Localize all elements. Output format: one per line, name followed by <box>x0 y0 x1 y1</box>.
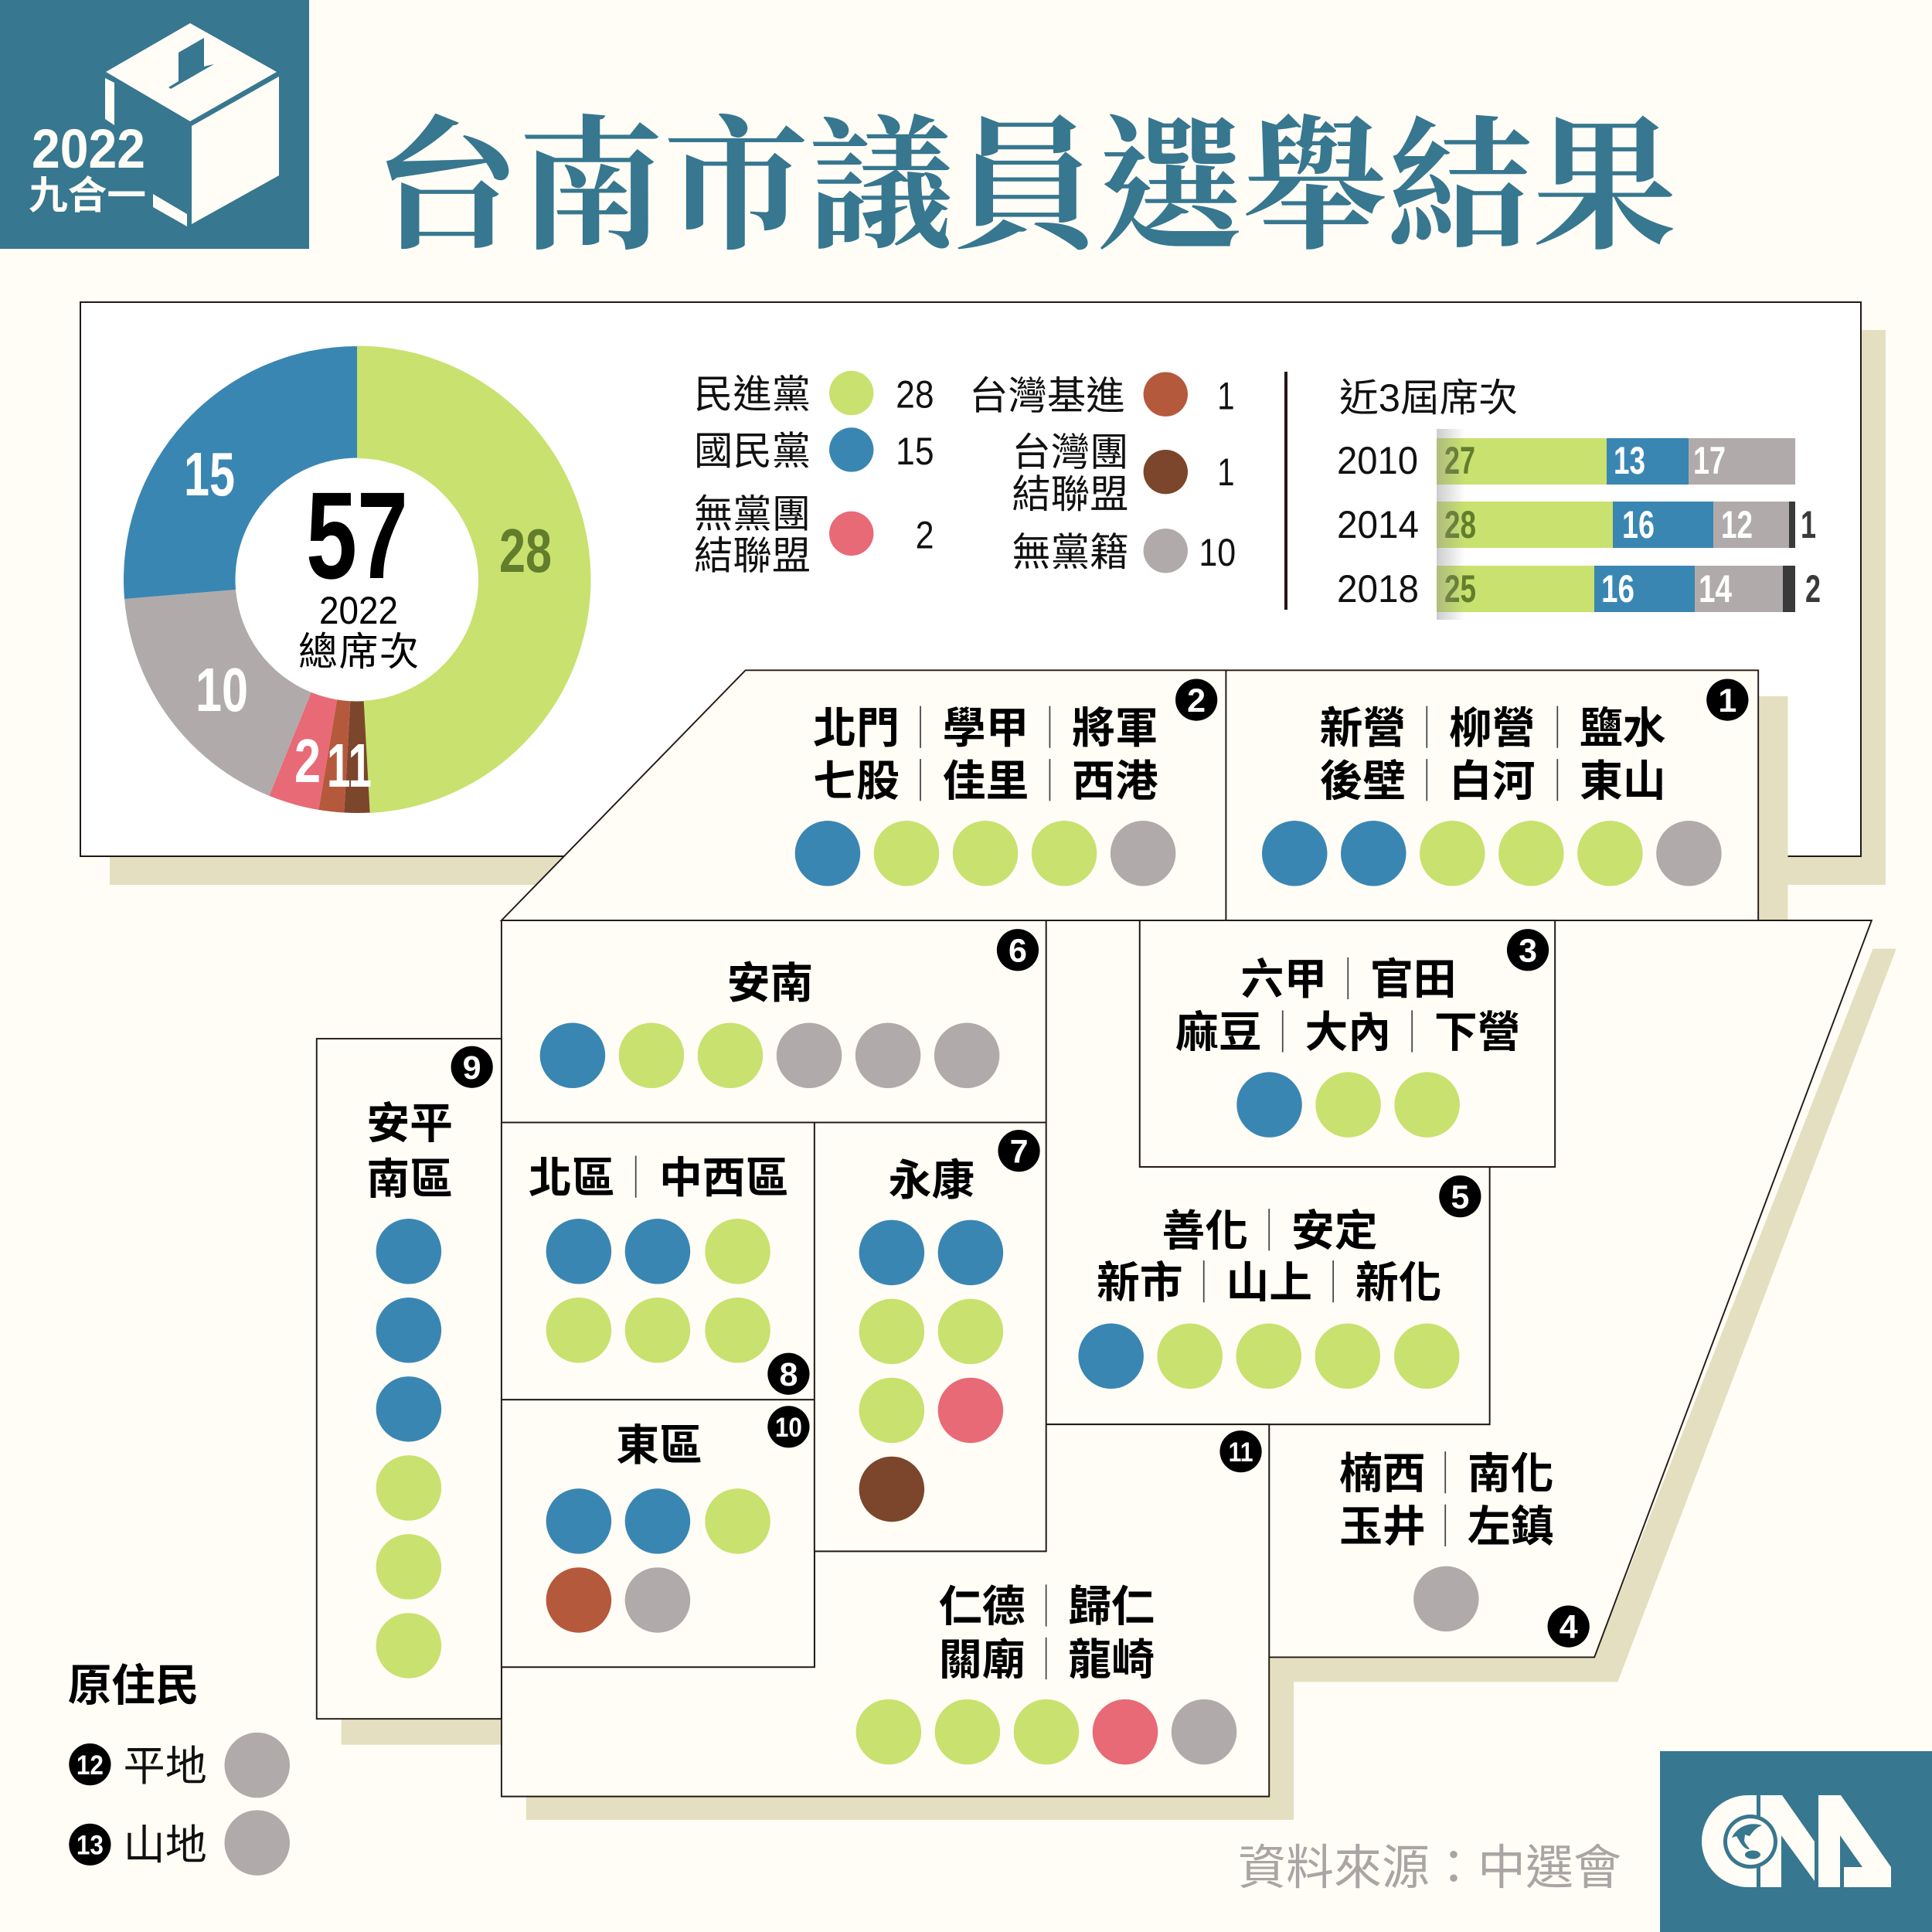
source note: 資料來源：中選會 <box>1238 1842 1621 1895</box>
legend item: 台灣團結聯盟: 結聯盟 <box>1012 472 1128 516</box>
region 9: 安平 南區 <box>317 1039 502 1719</box>
legend item: 台灣基進 <box>969 372 1235 417</box>
region 11: 仁德 歸仁 關廟 龍崎: 關廟 <box>939 1635 1026 1684</box>
region 8: 北區 中西區: 北區 <box>529 1153 615 1202</box>
region 3: 六甲 官田 麻豆 大內 下營: 官田 <box>1370 955 1457 1004</box>
district number badges: 11 <box>1229 1437 1253 1468</box>
legend item: 無黨團結聯盟 <box>694 492 934 578</box>
region 5: 善化 安定 新市 山上 新化: 新市 <box>1097 1258 1183 1307</box>
bar: 2010: 27 <box>1444 439 1475 482</box>
legend item: 無黨籍 <box>1012 529 1236 574</box>
平地 item <box>69 1733 290 1798</box>
region 3: 六甲 官田 麻豆 大內 下營: 麻豆 <box>1175 1008 1262 1056</box>
region 5: 善化 安定 新市 山上 新化: 安定 <box>1291 1206 1378 1255</box>
region 2: 北門 學甲 將軍 七股 佳里 西港: 將軍 <box>1072 703 1158 752</box>
region 2: 北門 學甲 將軍 七股 佳里 西港: 北門 <box>813 703 900 752</box>
region 3: 六甲 官田 麻豆 大內 下營: 下營 <box>1434 1008 1520 1056</box>
region 8: 北區 中西區: 中西區 <box>659 1153 788 1202</box>
header badge: 2022 ballot box <box>0 0 309 249</box>
region 3: 六甲 官田 麻豆 大內 下營: 大內 <box>1304 1008 1391 1056</box>
region 2: 北門 學甲 將軍 七股 佳里 西港: 佳里 <box>943 757 1029 805</box>
legend item: 無黨團結聯盟: 2 <box>916 513 934 557</box>
donut chart: 2022 seats <box>124 346 590 813</box>
bar: 2014: 12 <box>1721 503 1753 546</box>
district number badges: 4 <box>1560 1609 1578 1646</box>
平地 item: 平地 <box>123 1743 207 1790</box>
legend: party seat counts <box>694 371 1236 578</box>
region 1: 新營 柳營 鹽水 後壁 白河 東山: 後壁 <box>1320 757 1406 805</box>
indigenous districts <box>68 1661 290 1876</box>
donut label: 1 1: 11 <box>327 731 372 800</box>
district map <box>68 670 1896 1876</box>
legend item: 無黨團結聯盟: 無黨團 <box>694 492 811 536</box>
district number badges: 9 <box>463 1049 481 1087</box>
region 3: 六甲 官田 麻豆 大內 下營 <box>1140 920 1555 1167</box>
bar: 2014: 28 <box>1444 503 1476 546</box>
region 7: 永康 <box>815 1122 1046 1551</box>
region 8: 北區 中西區 <box>502 1122 815 1400</box>
bar: 2018: 14 <box>1699 567 1732 611</box>
district number badges: 6 <box>1009 932 1027 969</box>
legend item: 無黨籍: 無黨籍 <box>1012 530 1128 574</box>
district number badges: 3 <box>1519 932 1537 969</box>
bar: 2018: 16 <box>1601 567 1634 611</box>
donut label: 10: 10 <box>196 655 248 724</box>
山地 item <box>69 1810 290 1876</box>
donut label: 28: 28 <box>499 516 552 585</box>
heading: 原住民: 原住民 <box>68 1661 199 1709</box>
legend item: 台灣基進: 台灣基進 <box>969 373 1125 417</box>
region 2: 北門 學甲 將軍 七股 佳里 西港: 學甲 <box>943 703 1029 752</box>
bar: 2018: 2 <box>1805 567 1821 611</box>
region 7: 永康: 永康 <box>889 1156 975 1205</box>
icon: ballot box <box>105 23 279 226</box>
legend item: 民進黨: 28 <box>896 372 934 417</box>
bar chart heading: 近3屆席次 <box>1339 376 1518 420</box>
region 4: 楠西 南化 玉井 左鎮: 玉井 <box>1339 1502 1426 1551</box>
region 4: 楠西 南化 玉井 左鎮 <box>1269 920 1872 1657</box>
region 11: 仁德 歸仁 關廟 龍崎: 歸仁 <box>1068 1582 1155 1631</box>
legend item: 台灣團結聯盟 <box>1012 430 1235 516</box>
region 2: 北門 學甲 將軍 七股 佳里 西港: 七股 <box>813 757 900 805</box>
平地 item: 12 <box>77 1750 104 1781</box>
badge text: 2022: 2022 <box>32 119 145 180</box>
region 1: 新營 柳營 鹽水 後壁 白河 東山 <box>1226 670 1758 920</box>
title: 台南市議員選舉結果 <box>374 108 1677 268</box>
district number badges: 7 <box>1010 1133 1029 1170</box>
山地 item: 13 <box>77 1831 104 1861</box>
region 10: 東區 <box>502 1400 815 1667</box>
district number badges <box>451 679 1748 1648</box>
region 4: 楠西 南化 玉井 左鎮: 左鎮 <box>1468 1502 1554 1551</box>
region 6: 安南: 安南 <box>727 958 813 1007</box>
region 9: 安平 南區: 南區 <box>366 1155 453 1203</box>
region 5: 善化 安定 新市 山上 新化: 新化 <box>1355 1258 1441 1307</box>
region 3: 六甲 官田 麻豆 大內 下營: 六甲 <box>1241 955 1327 1004</box>
legend item: 國民黨: 15 <box>896 429 934 473</box>
legend item: 台灣團結聯盟: 台灣團 <box>1012 430 1128 474</box>
region 5: 善化 安定 新市 山上 新化: 善化 <box>1162 1206 1248 1255</box>
panel: summary <box>80 302 1861 856</box>
bar: 2014: 1 <box>1801 503 1816 546</box>
region 4: 楠西 南化 玉井 左鎮: 南化 <box>1468 1449 1554 1498</box>
donut centre: total 57: 57 <box>306 466 408 604</box>
region 1: 新營 柳營 鹽水 後壁 白河 東山: 白河 <box>1449 757 1536 805</box>
bar: 2010 <box>1337 438 1795 485</box>
donut label: 2: 2 <box>294 726 321 795</box>
region 1: 新營 柳營 鹽水 後壁 白河 東山: 柳營 <box>1449 703 1536 752</box>
region 9: 安平 南區: 安平 <box>366 1099 453 1148</box>
badge text: 九合一: 九合一 <box>29 174 146 217</box>
legend item: 台灣團結聯盟: 1 <box>1217 450 1235 494</box>
bar: 2010: 2010 <box>1337 439 1418 482</box>
bar: 2010: 13 <box>1614 439 1645 482</box>
region 1: 新營 柳營 鹽水 後壁 白河 東山: 新營 <box>1320 703 1406 752</box>
bar: 2018: 2018 <box>1337 567 1419 611</box>
region 2: 北門 學甲 將軍 七股 佳里 西港 <box>502 670 1226 920</box>
donut label: 15: 15 <box>184 440 235 509</box>
CNA logo <box>1660 1751 1932 1932</box>
legend item: 無黨籍: 10 <box>1199 530 1236 574</box>
bar: 2018 <box>1337 566 1821 612</box>
district number badges: 10 <box>775 1413 802 1443</box>
region 11: 仁德 歸仁 關廟 龍崎: 龍崎 <box>1068 1635 1155 1684</box>
region 5: 善化 安定 新市 山上 新化: 山上 <box>1226 1258 1312 1307</box>
bar: 2010: 17 <box>1693 439 1726 482</box>
donut centre: 總席次: 總席次 <box>298 630 420 674</box>
legend item: 國民黨 <box>694 427 934 473</box>
panel: summary shadow <box>110 330 1886 885</box>
district number badges: 2 <box>1187 682 1206 719</box>
region 1: 新營 柳營 鹽水 後壁 白河 東山: 東山 <box>1580 757 1666 805</box>
region 1: 新營 柳營 鹽水 後壁 白河 東山: 鹽水 <box>1580 703 1666 752</box>
legend item: 國民黨: 國民黨 <box>694 429 811 473</box>
legend item: 台灣基進: 1 <box>1217 373 1235 417</box>
region 11: 仁德 歸仁 關廟 龍崎: 仁德 <box>939 1582 1026 1631</box>
legend item: 民進黨: 民進黨 <box>694 372 811 417</box>
region 2: 北門 學甲 將軍 七股 佳里 西港: 西港 <box>1072 757 1158 805</box>
bar: 2018: 25 <box>1444 567 1476 611</box>
district number badges: 5 <box>1451 1179 1469 1216</box>
region 4: 楠西 南化 玉井 左鎮: 楠西 <box>1339 1449 1426 1498</box>
region 11: 仁德 歸仁 關廟 龍崎 <box>502 1424 1269 1797</box>
bar: 2014 <box>1337 502 1816 548</box>
region 5: 善化 安定 新市 山上 新化 <box>1046 920 1490 1424</box>
bar: 2014: 2014 <box>1337 503 1419 546</box>
district number badges: 1 <box>1718 682 1736 719</box>
legend item: 民進黨 <box>694 371 934 417</box>
district number badges: 8 <box>779 1356 798 1393</box>
region 10: 東區: 東區 <box>616 1420 702 1469</box>
region 6: 安南 <box>502 920 1046 1122</box>
donut centre: 2022: 2022 <box>319 589 398 632</box>
山地 item: 山地 <box>123 1822 207 1869</box>
legend item: 無黨團結聯盟: 結聯盟 <box>694 534 811 578</box>
bar: 2014: 16 <box>1622 503 1655 546</box>
bar chart: last 3 elections <box>1337 376 1821 620</box>
map shadow <box>342 696 1896 1820</box>
